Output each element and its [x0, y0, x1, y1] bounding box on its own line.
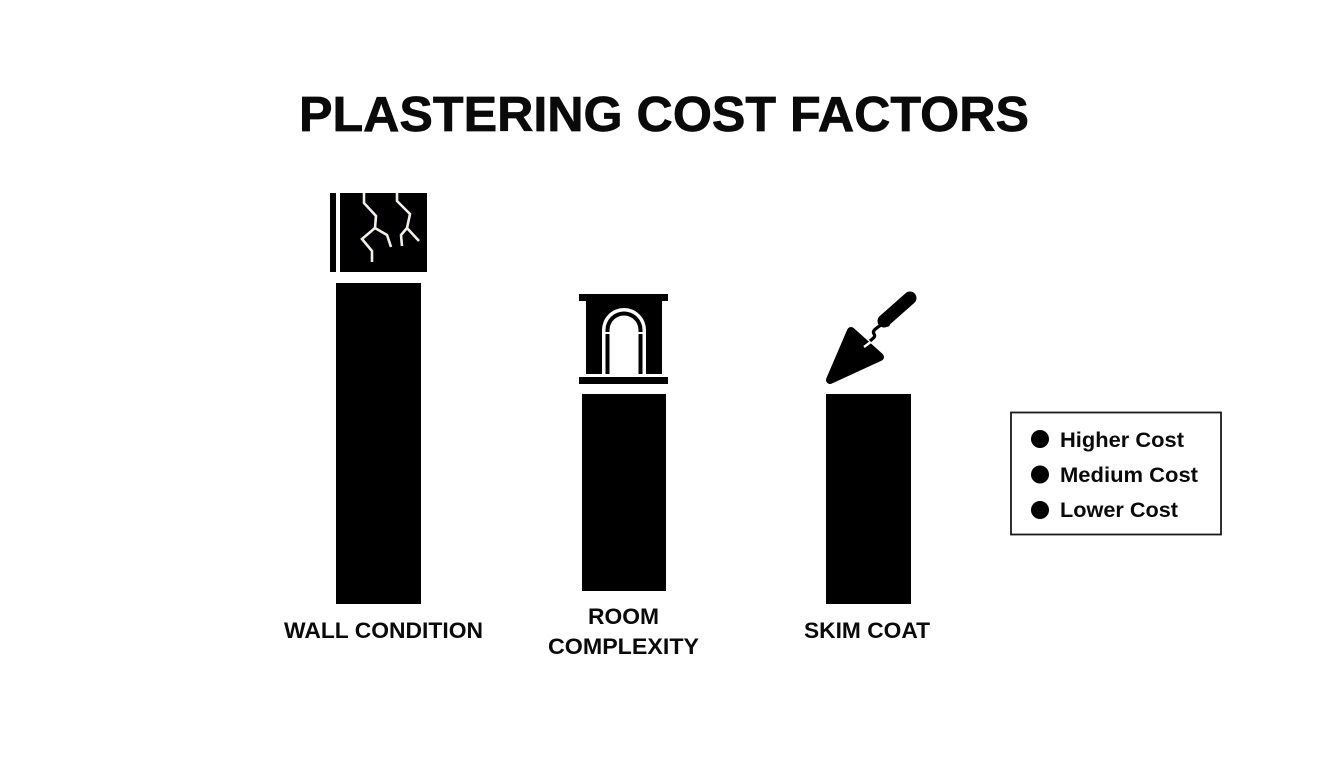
bar: room complexity [582, 394, 666, 591]
legend [1011, 412, 1221, 534]
label: room complexity: ROOM [588, 604, 659, 629]
panel: room complexity column [548, 294, 699, 659]
label: skim coat: SKIM COAT [804, 618, 931, 643]
legend item: medium cost: Medium Cost [1060, 463, 1198, 487]
bar: skim coat [826, 394, 911, 604]
legend item: higher cost: Higher Cost [1060, 428, 1184, 452]
legend item: lower cost: Lower Cost [1060, 498, 1178, 522]
title: PLASTERING COST FACTORS [299, 88, 1029, 142]
icon: trowel [830, 298, 910, 380]
label: room complexity [548, 604, 699, 659]
icon: arched doorway [579, 294, 668, 384]
panel: wall condition column [284, 193, 483, 643]
label: wall condition: WALL CONDITION [284, 618, 483, 643]
panel: skim coat column [804, 298, 931, 643]
icon: cracked wall [330, 193, 427, 272]
label: room complexity: COMPLEXITY [548, 634, 699, 659]
bar: wall condition [336, 283, 421, 604]
